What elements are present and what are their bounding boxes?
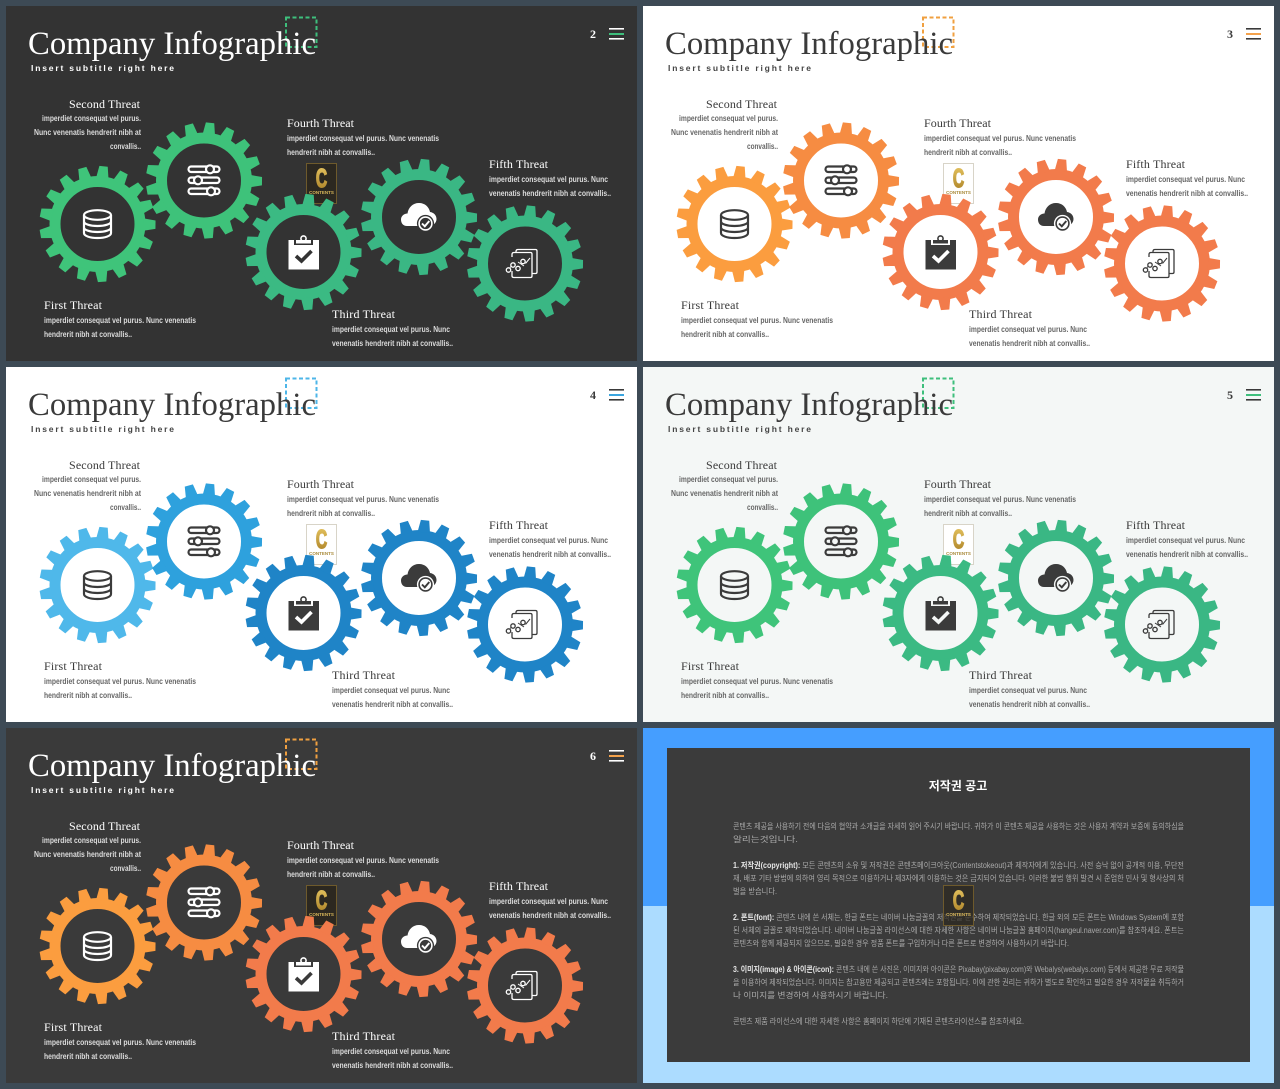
text: fourth threat: hendrerit nibh at convallis.. [287, 509, 375, 518]
text: fourth threat [924, 477, 1076, 518]
text: fifth threat [489, 879, 611, 920]
text: second threat: convallis.. [110, 864, 141, 873]
text: second threat: Second Threat [69, 819, 141, 833]
panel: slide 3 white orange gears [643, 6, 1274, 361]
panel: slide 6 dark orange gears [6, 728, 637, 1083]
text: fifth threat [1126, 157, 1248, 198]
gear 3: clipboard [882, 194, 999, 310]
logo: CONTENTS [309, 551, 334, 556]
text: fifth threat [489, 518, 611, 559]
gear 3: clipboard [245, 194, 362, 310]
panel: slide 4 white blue gears [6, 367, 637, 722]
text: second threat: Second Threat [69, 97, 141, 111]
text: third threat: imperdiet consequat vel purus. Nunc [332, 686, 450, 695]
gear 5: pages [1104, 566, 1220, 683]
copyright section 1: 재, 배포 기타 방법에 의하여 영리 목적으로 이용하거나 제3자에게 이용하는 것은 금지되어 있습니다. 이러한 불법 행위 발견 시 준엄한 민사 및 형사상의 처 [733, 873, 1184, 883]
subtitle: Insert subtitle right here [31, 63, 174, 73]
gear 1: database [39, 888, 156, 1004]
logo: CONTENTS [946, 190, 971, 195]
copyright intro: 알리는것입니다. [733, 834, 798, 844]
logo: CONTENTS [309, 912, 334, 917]
dashed accent square [923, 378, 954, 408]
subtitle: Insert subtitle right here [668, 424, 811, 434]
logo: C [316, 525, 327, 554]
logo: C [316, 164, 327, 193]
text: third threat: venenatis hendrerit nibh at convallis.. [332, 1061, 453, 1070]
logo [944, 164, 974, 204]
text: fourth threat: imperdiet consequat vel purus. Nunc venenatis [287, 495, 439, 504]
copyright section 3: 나 이미지를 변경하여 사용하시기 바랍니다. [733, 990, 888, 1000]
copyright heading: 저작권 공고 [929, 778, 987, 793]
logo: C [953, 886, 964, 915]
text: second threat: imperdiet consequat vel purus. [42, 114, 141, 123]
gear 4: cloud check [998, 159, 1114, 275]
gear 4: cloud check [361, 159, 477, 275]
text: second threat: Nunc venenatis hendrerit nibh at [671, 128, 778, 137]
text: second threat: convallis.. [110, 503, 141, 512]
copyright intro [733, 821, 1184, 844]
gear 1: database [39, 166, 156, 282]
text: fourth threat: hendrerit nibh at convallis.. [924, 509, 1012, 518]
text: second threat: Nunc venenatis hendrerit nibh at [34, 128, 141, 137]
logo [944, 886, 974, 926]
text: fifth threat: imperdiet consequat vel purus. Nunc [1126, 175, 1245, 184]
text: second threat [34, 458, 141, 512]
gear 5: pages [467, 205, 583, 322]
text: second threat [671, 458, 778, 512]
text: third threat: Third Threat [969, 307, 1033, 321]
gear 4: cloud check [998, 520, 1114, 636]
copyright section 2 [733, 912, 1185, 948]
logo: C [316, 886, 327, 915]
page number: 3 [1227, 27, 1233, 41]
text: first threat [44, 298, 196, 339]
page number: 6 [590, 749, 596, 763]
gear 4: cloud check [361, 881, 477, 997]
icon: menu [609, 750, 624, 762]
logo [306, 886, 336, 926]
text: third threat: Third Threat [332, 307, 396, 321]
text: third threat: Third Threat [332, 1029, 396, 1043]
text: fifth threat: venenatis hendrerit nibh at convallis.. [489, 911, 611, 920]
title: Company Infographic [665, 26, 953, 62]
text: second threat: imperdiet consequat vel purus. [42, 475, 141, 484]
logo: CONTENTS [309, 190, 334, 195]
text: fourth threat: imperdiet consequat vel purus. Nunc venenatis [287, 856, 439, 865]
text: fourth threat [287, 116, 439, 157]
gear 2: sliders [146, 122, 262, 239]
text: fifth threat: imperdiet consequat vel purus. Nunc [489, 175, 608, 184]
text: third threat [332, 1029, 453, 1070]
text: second threat [34, 819, 141, 873]
text: fourth threat [287, 477, 439, 518]
text: fifth threat: imperdiet consequat vel purus. Nunc [489, 536, 608, 545]
text: fifth threat [1126, 518, 1248, 559]
text: first threat: First Threat [681, 659, 740, 673]
text: third threat [332, 668, 453, 709]
copyright section 2: 된 서체의 글꼴로 제작되었습니다. 네이버 나눔글꼴 라이선스에 대한 자세한 사항은 네이버 나눔글꼴 홈페이지(hangeul.naver.com)를 참조하세요. 폰트는 [733, 925, 1184, 935]
text: second threat: convallis.. [747, 142, 778, 151]
page number: 4 [590, 388, 596, 402]
text: first threat [44, 659, 196, 700]
text: first threat: hendrerit nibh at convallis.. [44, 330, 132, 339]
text: first threat: hendrerit nibh at convallis.. [681, 330, 769, 339]
gear 2: sliders [146, 844, 262, 961]
text: first threat: First Threat [44, 298, 103, 312]
text: third threat: Third Threat [969, 668, 1033, 682]
text: fourth threat: hendrerit nibh at convallis.. [287, 870, 375, 879]
icon: menu [609, 28, 624, 40]
text: third threat: venenatis hendrerit nibh at convallis.. [332, 700, 453, 709]
text: second threat: Nunc venenatis hendrerit nibh at [34, 850, 141, 859]
text: second threat [34, 97, 141, 151]
text: fourth threat [924, 116, 1076, 157]
text: third threat: imperdiet consequat vel purus. Nunc [969, 325, 1087, 334]
gear 2: sliders [783, 483, 899, 600]
text: fifth threat: venenatis hendrerit nibh at convallis.. [489, 189, 611, 198]
text: fifth threat: imperdiet consequat vel purus. Nunc [1126, 536, 1245, 545]
logo [306, 164, 336, 204]
text: third threat: venenatis hendrerit nibh at convallis.. [969, 339, 1090, 348]
text: second threat [671, 97, 778, 151]
copyright intro: 콘텐츠 제공을 사용하기 전에 다음의 협약과 소개글을 자세히 읽어 주시기 바랍니다. 귀하가 이 콘텐츠 제공을 사용하는 것은 사용자 계약과 보증에 동의하심을 [733, 821, 1184, 831]
text: third threat: imperdiet consequat vel purus. Nunc [969, 686, 1087, 695]
text: second threat: Second Threat [706, 97, 778, 111]
dashed accent square [923, 18, 954, 47]
dashed accent square [286, 378, 316, 408]
subtitle: Insert subtitle right here [668, 63, 811, 73]
text: third threat: imperdiet consequat vel purus. Nunc [332, 325, 450, 334]
copyright section 2: 2. 폰트(font): 콘텐츠 내에 쓴 서체는, 한글 폰트는 네이버 나눔글꼴의 저작권을 준수하여 제작되었습니다. 한글 외의 모든 폰트는 Windows System에 포함 [733, 912, 1185, 922]
text: third threat: Third Threat [332, 668, 396, 682]
text: first threat [44, 1020, 196, 1061]
text: first threat: hendrerit nibh at convallis.. [44, 691, 132, 700]
text: second threat: Nunc venenatis hendrerit nibh at [671, 489, 778, 498]
text: first threat: imperdiet consequat vel purus. Nunc venenatis [681, 677, 833, 686]
text: third threat: venenatis hendrerit nibh at convallis.. [332, 339, 453, 348]
text: first threat [681, 298, 833, 339]
text: fifth threat: Fifth Threat [489, 518, 549, 532]
gear 1: database [676, 166, 793, 282]
text: second threat: Second Threat [69, 458, 141, 472]
text: third threat [969, 668, 1090, 709]
text: fifth threat: Fifth Threat [1126, 157, 1186, 171]
text: first threat [681, 659, 833, 700]
panel: copyright notice [643, 728, 1274, 1083]
text: first threat: imperdiet consequat vel purus. Nunc venenatis [681, 316, 833, 325]
panel: slide 2 dark green gears [6, 6, 637, 361]
title: Company Infographic [28, 748, 316, 784]
text: first threat: hendrerit nibh at convallis.. [44, 1052, 132, 1061]
gear 3: clipboard [882, 555, 999, 671]
subtitle: Insert subtitle right here [31, 785, 174, 795]
text: fourth threat [287, 838, 439, 879]
text: third threat [332, 307, 453, 348]
copyright section 1 [733, 860, 1184, 896]
icon: menu [1246, 28, 1261, 40]
gear 2: sliders [146, 483, 262, 600]
dashed accent square [286, 18, 316, 47]
text: first threat: imperdiet consequat vel purus. Nunc venenatis [44, 1038, 196, 1047]
gear 4: cloud check [361, 520, 477, 636]
gear 1: database [676, 527, 793, 643]
gear 5: pages [467, 927, 583, 1044]
copyright section 2: 콘텐츠와 함께 제공되지 않으므로, 필요한 경우 정품 폰트를 구입하거나 다른 폰트로 변경하여 사용하시기 바랍니다. [733, 938, 1069, 948]
text: fourth threat: Fourth Threat [287, 477, 355, 491]
copyright footer line: 콘텐츠 제품 라이선스에 대한 자세한 사항은 홈페이지 하단에 기재된 콘텐츠라이선스를 참조하세요. [733, 1016, 1024, 1026]
text: fifth threat: Fifth Threat [489, 157, 549, 171]
text: fifth threat: Fifth Threat [489, 879, 549, 893]
gear 1: database [39, 527, 156, 643]
text: second threat: Second Threat [706, 458, 778, 472]
logo: CONTENTS [946, 912, 971, 917]
title: Company Infographic [28, 26, 316, 62]
logo: C [953, 525, 964, 554]
text: fourth threat: Fourth Threat [924, 477, 992, 491]
dashed accent square [286, 740, 316, 769]
text: fourth threat: Fourth Threat [287, 116, 355, 130]
text: fifth threat: Fifth Threat [1126, 518, 1186, 532]
text: fourth threat: imperdiet consequat vel purus. Nunc venenatis [924, 495, 1076, 504]
text: second threat: imperdiet consequat vel purus. [42, 836, 141, 845]
text: fourth threat: hendrerit nibh at convallis.. [287, 148, 375, 157]
text: first threat: First Threat [681, 298, 740, 312]
text: fourth threat: Fourth Threat [924, 116, 992, 130]
text: second threat: imperdiet consequat vel purus. [679, 475, 778, 484]
gear 3: clipboard [245, 916, 362, 1032]
text: fifth threat [489, 157, 611, 198]
page number: 5 [1227, 388, 1233, 402]
text: first threat: imperdiet consequat vel purus. Nunc venenatis [44, 677, 196, 686]
text: second threat: Nunc venenatis hendrerit nibh at [34, 489, 141, 498]
text: fourth threat: hendrerit nibh at convallis.. [924, 148, 1012, 157]
text: second threat: convallis.. [747, 503, 778, 512]
text: third threat: venenatis hendrerit nibh at convallis.. [969, 700, 1090, 709]
logo: CONTENTS [946, 551, 971, 556]
title: Company Infographic [28, 387, 316, 423]
text: first threat: First Threat [44, 659, 103, 673]
text: fourth threat: imperdiet consequat vel purus. Nunc venenatis [924, 134, 1076, 143]
icon: menu [609, 389, 624, 401]
text: third threat [969, 307, 1090, 348]
icon: menu [1246, 389, 1261, 401]
logo: C [953, 164, 964, 193]
text: third threat: imperdiet consequat vel purus. Nunc [332, 1047, 450, 1056]
copyright section 3: 3. 이미지(image) & 아이콘(icon): 콘텐츠 내에 쓴 사진은, 이미지와 아이콘은 Pixabay(pixabay.com)와 Webalys(webalys.com) 등에서 제공한 무료 저작물 [733, 964, 1184, 974]
text: fifth threat: venenatis hendrerit nibh at convallis.. [1126, 189, 1248, 198]
gear 2: sliders [783, 122, 899, 239]
copyright section 1: 1. 저작권(copyright): 모든 콘텐츠의 소유 및 저작권은 콘텐츠메이크아웃(Contentstokeout)과 제작자에게 있습니다. 사전 승낙 없이 공개적 이용, 무단전 [733, 860, 1184, 870]
panel: slide 5 light green gears [643, 367, 1274, 722]
text: second threat: convallis.. [110, 142, 141, 151]
logo [944, 524, 974, 564]
gear 5: pages [467, 566, 583, 683]
gear 3: clipboard [245, 555, 362, 671]
page number: 2 [590, 27, 596, 41]
text: fourth threat: Fourth Threat [287, 838, 355, 852]
logo [306, 524, 336, 564]
text: first threat: imperdiet consequat vel purus. Nunc venenatis [44, 316, 196, 325]
copyright section 3 [733, 964, 1184, 1000]
text: fifth threat: venenatis hendrerit nibh at convallis.. [1126, 550, 1248, 559]
text: fifth threat: imperdiet consequat vel purus. Nunc [489, 897, 608, 906]
text: first threat: First Threat [44, 1020, 103, 1034]
gear 5: pages [1104, 205, 1220, 322]
text: fifth threat: venenatis hendrerit nibh at convallis.. [489, 550, 611, 559]
title: Company Infographic [665, 387, 953, 423]
copyright section 1: 벌을 받습니다. [733, 886, 777, 896]
copyright section 3: 을 이용하여 제작되었습니다. 이미지는 참고용만 제공되고 콘텐츠에는 포함됩니다. 이에 관한 권리는 귀하가 별도로 확인하고 필요한 경우 저작물을 취득하거 [733, 977, 1184, 987]
text: first threat: hendrerit nibh at convallis.. [681, 691, 769, 700]
text: second threat: imperdiet consequat vel purus. [679, 114, 778, 123]
subtitle: Insert subtitle right here [31, 424, 174, 434]
text: fourth threat: imperdiet consequat vel purus. Nunc venenatis [287, 134, 439, 143]
